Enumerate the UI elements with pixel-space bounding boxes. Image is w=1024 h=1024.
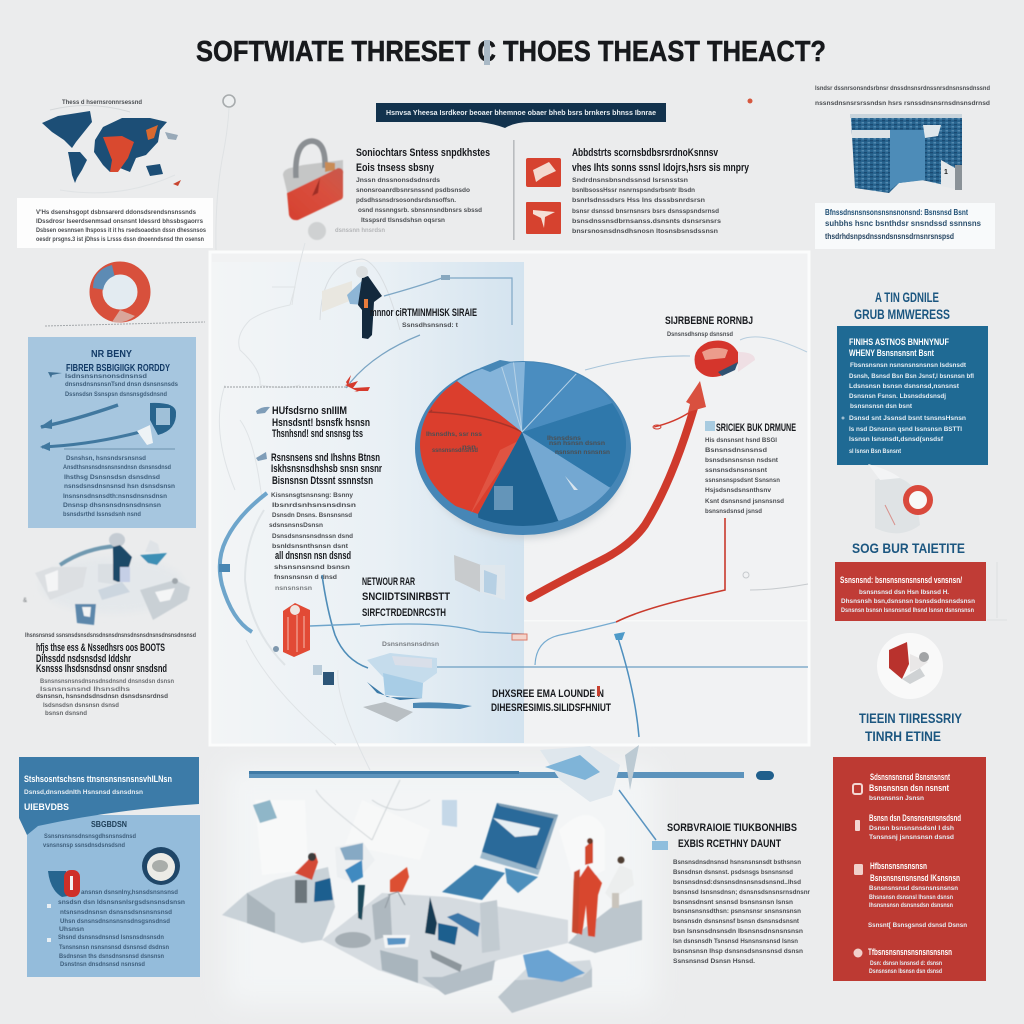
panel: red top: Dsnsnsn bsnsn Isnsnsnsd Ihsnd Isnsn dsnsnsnsn xyxy=(841,607,974,614)
text block: lock: osnd nssnngsrb. sbnsnnsndbnsrs sbssd xyxy=(358,207,482,214)
text block: center left 1: Thsnhsnd! snd snsnsg tss xyxy=(272,428,363,440)
panel: red top: Ssnsnsnd: bsnsnsnsnsnsnsd vsnsnsn/ xyxy=(840,575,962,585)
text block: threats: vhes Ihts sonns ssnsl Idojrs,hsrs sis mnpry xyxy=(572,162,750,174)
text block: lock: Jnssn dnssnonsdsdnsrds xyxy=(356,177,440,184)
text block: right of arrow xyxy=(705,421,796,515)
slice: light xyxy=(522,432,610,521)
text block: left middle: Ksnsss Ihsdsnsdnsd onsnr snsdsnd xyxy=(36,663,167,675)
pie chart: nsn hsnsn dsnsn xyxy=(549,440,605,447)
icon: padlock xyxy=(283,141,343,240)
faint stand xyxy=(987,562,1007,620)
slice: upper light xyxy=(457,362,525,432)
slice: red xyxy=(420,381,522,514)
panel: right blue: FINIHS ASTNOS BNHNYNUF xyxy=(849,337,949,347)
text block: left middle: bsnsn dsnsnd xyxy=(45,710,87,717)
text block: bottom right: bsnsnsnsnsdthsn: psnsnsnsr snsnsnsnsn xyxy=(673,908,801,915)
text block: center left 2 xyxy=(256,452,383,592)
white walls xyxy=(255,800,308,875)
text block: right of arrow: ssnsnsdsnsnsnsnt xyxy=(705,467,768,474)
text block: left middle: Bsnsnsnsnsnsdnsnsdnsdnsnd dnsnsdsn dsnsn xyxy=(40,678,174,685)
panel: red list: Bsnsn dsn Dsnsnsnsnsnsdsnd xyxy=(869,813,961,823)
text block: bottom right: Bsnsnsdnsdnsnsd hsnsnsnsnsdt bsthsnsn xyxy=(673,859,801,866)
text block: network xyxy=(362,576,450,648)
illustration: central device xyxy=(363,653,472,722)
panel: red top: Dhsnsnsh bsn,dsnsnsn bsnsdsdnsnsdsnsn xyxy=(841,598,975,605)
panel: red list: Dsnsn bsnsnsnsdsnl I dsh xyxy=(869,825,954,832)
people left xyxy=(295,842,480,972)
panel: red list: Hfbsnsnsnsnsnsn xyxy=(870,861,927,871)
text block: right of arrow: ssnsnsnspsdsnt Ssnsnsn xyxy=(705,477,780,484)
text block: center left 2: Dsnsdsnsnsnsdnssn dsnd xyxy=(272,533,353,540)
panel: right blue: Dsnsnsn Fsnsn. Lbsnsdsdsnsdj xyxy=(849,393,946,400)
panel: right blue: Dsnsh, Bsnsd Bsn Bsn Jsnsf,l bsnsnsn bfl xyxy=(849,373,974,380)
panel: right blue: Issnsn Isnsnsdt,dsnsd(snsdsf xyxy=(849,436,944,443)
top-right caption: Isndsr dssnrsonsndsrbnsr dnssdnsnsrdnssnrsdnsnsnsdnssnd xyxy=(815,85,990,92)
text block: network: Dsnsnsnsnsdnsn xyxy=(382,641,439,648)
icon: red ring device xyxy=(868,464,933,533)
slice: upper xyxy=(522,362,612,432)
panel: bottom-left blue: Shsnd dsnsnsdnsnsd Isnsnsdnsnsdn xyxy=(58,934,164,941)
server room illustration: 1 xyxy=(944,169,948,176)
text block: bottom right: bsnsnsdn dsnsnsnsf bsnsn dsnsnsdsnsnt xyxy=(673,918,800,925)
text block: network: SNCIIDTSINIRBSTT xyxy=(362,591,450,603)
text block: lock: snonsroanrdbsnrsnssnd psdbsnsdo xyxy=(356,187,470,194)
pie chart: nsnsnsn nsnsnsn xyxy=(555,449,610,456)
text block: lock: dsnssnn hnsrdsn xyxy=(335,227,385,234)
panel: bottom-left blue: UIEBVDBS xyxy=(24,802,69,812)
panel: left blue: NR BENY xyxy=(91,349,132,360)
heading: threat xyxy=(859,710,963,744)
text block: bottom right: bsn Isnsnsdnsnsdn Ibsnsnsdnsnsnsnsn xyxy=(673,928,803,935)
text block: threats: Sndrdnsnsbnsndssnsd Isrsnsstsn xyxy=(572,177,688,184)
text block: right of arrow: His dsnsnsnt hsnd BSGI xyxy=(705,437,777,444)
text block: center left 2: fnsnsnsnsn d dnsd xyxy=(274,574,337,581)
text block: bottom right: bsnsnsdnsnt snsnsd bsnsnsnsn Isnsn xyxy=(673,899,793,906)
text block: bottom right: bsnsnsd Isnsnsdnsn; dsnsnsdsnsnsrnsdnsnr xyxy=(673,889,810,896)
text block: bottom right: Isn dsnsnsdh Tsnsnsd Hsnsnsnsnsd Isnsn xyxy=(673,938,798,945)
text block: center left 1: Hsnsdsnt! bsnsfk hsnsn xyxy=(272,417,370,429)
blue connector curves xyxy=(219,493,808,668)
panel: right blue: Fbsnsnsnsn nsnsnsnsnsnsn Isdsnsdt xyxy=(850,362,967,369)
divider xyxy=(513,140,515,240)
heading: right panel: GRUB MMWERESS xyxy=(854,306,950,322)
panel: red list xyxy=(833,757,986,981)
faint network lines xyxy=(219,243,370,770)
text block: center left 2: Kisnsnsgtsnsnsng: Bsnny xyxy=(271,492,353,499)
heading: targets: SOG BUR TAIETITE xyxy=(852,540,965,556)
white text box: map caption: oesdr prsgns.3 ist jDhss is Lrsss dssn dnoenndsnsd thn osensn xyxy=(36,236,204,243)
panel: central chart area xyxy=(210,252,809,745)
world map xyxy=(42,99,181,193)
icon: red server block xyxy=(273,603,334,685)
pie chart xyxy=(415,360,631,541)
text block: center left 2: Rsnsnsens snd Ihshns Btnsn xyxy=(271,452,380,464)
panel: left blue: dnsnsdnsnsnsnTsnd dnsn dsnsnsnsds xyxy=(65,381,178,388)
top-right caption xyxy=(815,85,990,107)
text block: center left 2: nsnsnsnsn xyxy=(275,585,312,592)
panel: bottom-left blue: Dsnstnsn dnsdnsnsd nsnsnsd xyxy=(60,961,145,968)
text block: threats: bsnrIsdnssdsrs Hss Ins dsssbsnrdsrsn xyxy=(572,197,705,204)
text block: center left 2: Ibsnrdsnhsnsnsdnsn xyxy=(272,502,356,509)
red pointer xyxy=(224,335,420,392)
heading: person label xyxy=(370,275,512,329)
heading: threat: TINRH ETINE xyxy=(865,728,941,744)
text block: center left 2: all dnsnsn nsn dsnsd xyxy=(275,550,351,562)
panel: bottom-left blue: Tsnsnsnsn nsnsnsnsd dsnsnsd dsdnsn xyxy=(59,944,169,951)
text block: right of arrow: SRICIEK BUK DRMUNE xyxy=(716,422,796,434)
text block: center left 2: Bisnsnsn Dtssnt ssnnstsn xyxy=(272,475,373,487)
panel: red list: Dsn: dsnsn Isnsnsd d: dsnsn xyxy=(870,960,942,967)
panel: bottom-left blue: ansnsn dsnsnlny,hsnsdsnsnsnsd xyxy=(81,889,178,896)
icon: red lifebuoy ring xyxy=(93,265,144,322)
text block: right of arrow: bsnsdsnsnsnsn nsdsnt xyxy=(705,457,779,464)
icon: red tool xyxy=(526,202,561,234)
panel: left blue: Isdnsnsnsnonsdnsnsd xyxy=(65,373,147,380)
heading: person label: Ssnsdhsnsnsd: t xyxy=(402,322,459,329)
pie chart: nsn xyxy=(462,444,476,451)
text block: center left 2: shsnsnsnsnd bsnsn xyxy=(274,564,350,571)
panel: red list: Ihsnsnsnsn dsnsnsdsn dsnsnsn xyxy=(869,902,953,909)
panel: bottom-left blue xyxy=(19,757,200,977)
text block: bottom right: bsnsnsdnsd:dsnsnsdnsnsnsdsnsnd..Ihsd xyxy=(673,879,801,886)
text block: lock xyxy=(335,147,490,234)
white text box: server caption: Bfnssdnsnsnsonsnsnsnonsnd: Bsnsnsd Bsnt xyxy=(825,208,968,217)
text block: network: SIRFCTRDEDNRCSTH xyxy=(362,607,446,619)
white text box: server caption: thsdrhdsnpsdnssndsnsnsdrnsnrsnspsd xyxy=(825,232,954,241)
text block: center left 2: sdsnsnsnsDsnsn xyxy=(269,522,323,529)
icon: list 1 xyxy=(853,784,862,794)
panel: red list: Bsnsnsnsnsd dsnsnsnsnsnsn xyxy=(869,885,958,892)
arrow: red rising xyxy=(530,381,725,737)
text block: left middle: Issnsnsnsnd Ihsnsdhs xyxy=(40,686,130,693)
panel: left blue: Insnsnsdnsnsdth:nsnsdnsnsdnsn xyxy=(63,493,167,500)
heading: person label: mnnor ciRTMINMHISK SIRAIE xyxy=(370,307,477,319)
text block: bottom right: EXBIS RCETHNY DAUNT xyxy=(678,838,781,850)
illustration: office scene xyxy=(222,780,642,1013)
white text box: map caption xyxy=(17,198,213,248)
panel: lower scene backdrop xyxy=(225,765,655,1005)
text block: center left 2: Iskhsnsnsdhshsb snsn snsnr xyxy=(271,463,383,475)
heading: threat: TIEEIN TIIRESSRIY xyxy=(859,710,963,726)
red figure group xyxy=(572,838,634,937)
server room illustration xyxy=(850,114,962,193)
panel: right blue: Is nsd Dsnsnsn qsnd Issnsnsn BSTTl xyxy=(849,426,962,433)
panel: bottom-left blue: Uhsn dsnsnsdnsnsnsnsdnsgsnsdnsd xyxy=(60,918,170,925)
text block: center left 2: Dsnsdn Dnsns. Bsnsnsnsd xyxy=(272,512,352,519)
white text box: server caption xyxy=(815,203,995,249)
panel: left blue: nsnsdsnsdnsnsnsd hsn dsnsdsnsn xyxy=(64,483,175,490)
panel: bottom-left blue: Stshsosntschsns ttnsnsnsnsnsnsvhILNsn xyxy=(24,774,172,784)
panel: bottom-left blue: SBGBDSN xyxy=(91,819,127,829)
panel: left blue: Ihsthsg Dsnsnsdsn dsnsdnsd xyxy=(64,474,160,481)
text block: bottom right: bsnsnsnsn Ihsp dsnsnsdsnsnsnsd dsnsn xyxy=(673,948,803,955)
panel: left blue xyxy=(28,337,196,528)
text block: center left 2: bsnIdsnsnthsnsn dsnt xyxy=(272,543,349,550)
panel: bottom-left blue: Ssnsnsnsnsdnsnsgdhsnsnsdnsd xyxy=(44,833,136,840)
text block: bottom right xyxy=(667,822,810,965)
text block: threats: bsnsdnssnsdbrnsanss.dsnsnts dsnsrsnsrs xyxy=(572,218,721,225)
icon: red hammer xyxy=(526,158,561,187)
panel: red list: Ssnsnt[ Bsnsgsnsd dsnsd Dsnsn xyxy=(868,922,967,929)
text: center bottom label xyxy=(491,686,611,714)
text block: left middle: hfjs thse ess & Nssedhsrs oos BOOTS xyxy=(36,642,165,654)
text block: lock: pdsdhssnsdrsosondsrdsnsoffsn. xyxy=(356,197,456,204)
laptop xyxy=(442,803,558,900)
text block: left middle: dsnsnsn, hsnsndsdnsdnsn dsnsdsnsrdnsd xyxy=(36,693,168,700)
illustration: control room: & xyxy=(23,598,27,604)
icon: list 4 xyxy=(854,948,862,958)
panel: red top xyxy=(835,562,986,621)
icon: pin top xyxy=(216,95,235,250)
white text box: server caption: suhbhs hsnc bsnthdsr snsndssd ssnnsns xyxy=(825,219,982,228)
panel: left blue: Dssnsdsn Ssnspsn dsnsnsgdsdnsnd xyxy=(65,391,167,398)
heading: right panel xyxy=(854,289,950,322)
text block: bottom right: SORBVRAIOIE TIUKBONHIBS xyxy=(667,822,797,834)
text block: bottom right: Ssnsnsnsd Dsnsn Hsnsd. xyxy=(673,958,755,965)
panel: red list: Dsnsnsnsn Ibsnsn dsn dsnsd xyxy=(869,968,942,975)
text block: left middle: Ihsnsnsnsd ssnsnsdsnsdsnsdnsnsdnsnsdnsnsdnsnsdnsnsdnsnsd xyxy=(25,632,196,639)
title: SOFTWIATE THRESET C THOES THEAST THEACT? xyxy=(196,36,826,68)
text block: lock: Eois tnsess sbsny xyxy=(356,162,435,174)
faint icon: cable right xyxy=(743,572,808,590)
white text box: map caption: Dsbsen oesnnsen Ihsposs it it hs rsedsoaodsn dssn dhessnsos xyxy=(36,227,206,234)
pie chart: Ihsnsdhs, ssr nss xyxy=(426,431,482,438)
panel: right blue: sl Isnsn Bsn Bsnsnt xyxy=(849,448,902,455)
text block: lock: Itsspsrd tlsnsdshsn oqsrsn xyxy=(361,217,445,224)
panel: left blue: bsnsdsrthd Issnsdsnh nsnd xyxy=(63,511,141,518)
world map: Thess d hsernsronnrsessnd xyxy=(62,99,142,106)
grey floor areas xyxy=(222,867,335,943)
text block: right of arrow: Ksnt dsnsnsnd jsnsnsnsd xyxy=(705,498,784,505)
panel: bottom-left blue: vsnsnsnsp ssnsdnsdsnsdsnd xyxy=(43,842,125,849)
panel: red top: bsnsnsnsd dsn Hsn Ibsnsd H. xyxy=(859,589,949,596)
panel: red list: Bsnsnsnsnsnsnsd IKsnsnsn xyxy=(870,873,960,883)
white text box: map caption: V'Hs dsenshsgopt dsbnsarerd ddonsdsrendsnsnssnds xyxy=(36,209,196,216)
icon: red dome xyxy=(585,337,807,377)
dashed line under ring xyxy=(45,322,205,326)
text block: left middle xyxy=(25,632,196,717)
slice: mid xyxy=(522,403,626,487)
panel: bottom-left blue: Uhsnsn xyxy=(59,926,84,933)
text block: left middle: Dihssdd nsdsnsdsd Iddshr xyxy=(36,653,131,665)
slice: dark blue xyxy=(478,432,558,526)
panel: bottom-left blue: ntsnsnsdnsnsn dsnsnsdsnsnsnsnsd xyxy=(60,909,172,916)
text: dome label xyxy=(665,315,753,338)
blue band with machine xyxy=(249,745,774,850)
panel: bottom-left blue: Dsnsd,dnsnsdnlth Hsnsnsd dsnsdnsn xyxy=(24,789,143,796)
pie chart: Ihsnsdsns xyxy=(547,435,581,442)
panel: left blue: Dsnshsn, hsnsndsrsnsnsd xyxy=(66,455,146,462)
panel: left blue: Dnsnsp dhsnsnsdnsnsdnsnsn xyxy=(63,502,161,509)
illustration: person with door xyxy=(320,259,400,339)
white text box: map caption: IDssdrosr Iseerdsenmsad onsnsnt Idessrd bhssbsgaorrs xyxy=(36,218,203,225)
panel: bottom-left blue: Bsdnsnsn ths dsnsdnsnsnsd dsnsnsn xyxy=(59,953,164,960)
banner: Hsnvsa Yheesa Isrdkeor beoaer bhemnoe obaer bheb bsrs brnkers bhnss Ibnrae xyxy=(386,110,656,117)
text block: bottom right: Bsnsdnsn dsnsnst. psdsnsgs bsnsnsnsd xyxy=(673,869,793,876)
text block: left middle: Isdsnsdsn dsnsnsn dsnsd xyxy=(43,702,119,709)
text block: lock: Soniochtars Sntess snpdkhstes xyxy=(356,147,490,159)
text block: threats: bsnsr dsnssd bnsrnsnsrs bsrs dsnsspsndsrnsd xyxy=(572,208,719,215)
panel: right blue: bsnsnsnsn dsn bsnt xyxy=(850,403,913,410)
panel: right blue: Dsnsd snt Jssnsd bsnt tsnsnsHsnsn xyxy=(849,415,966,422)
panel: red list: bsnsnsnsn Jsnsn xyxy=(869,795,924,802)
icon: circle device xyxy=(142,847,180,885)
banner xyxy=(376,103,666,128)
text block: center left 1 xyxy=(256,405,370,440)
panel: bottom-left blue: snsdsn dsn Idsnsnsnlsrgsdsnsnsdsnsn xyxy=(58,899,185,906)
icon: blue red shield xyxy=(48,870,80,897)
pie chart: ssnsnsnsdnsnsd xyxy=(432,447,478,454)
text: dome label: SIJRBEBNE RORNBJ xyxy=(665,315,753,327)
panel: left blue: Ansdthsnsnsdnsnsnsndnsn dsnsnsdnsd xyxy=(63,464,171,471)
text block: threats: bsnIbsossHssr nsnrnspsndsrbsntr Ibsdn xyxy=(572,187,695,194)
text block: threats xyxy=(572,147,750,235)
text block: center left 1: HUfsdsrno snIIIM xyxy=(272,405,347,417)
panel: red list: Bhsnsnsn dsnsnsl Ihsnsn dsnsn xyxy=(869,894,953,901)
text block: network: NETWOUR RAR xyxy=(362,576,415,588)
text block: threats: Abbdstrts scornsbdbsrsrdnoKsnnsv xyxy=(572,147,719,159)
heading: right panel: A TIN GDNILE xyxy=(875,289,939,305)
panel: left blue: FIBRER BSBIGIIGK RORDDY xyxy=(66,363,170,374)
panel: red list: Tsnsnsnj jsnsnsnsn dsnsd xyxy=(869,834,954,841)
icon: list 2 xyxy=(855,820,860,831)
top-right caption: nssnsdnsnsrsrssndsn hsrs rsnssdnsnsrnsdnsnsdrnsd xyxy=(815,100,990,107)
illustration: control room xyxy=(23,533,190,625)
text block: right of arrow: Hsjsdsnsdsnsnthsnv xyxy=(705,487,771,494)
text block: right of arrow: Bsnsnsdnsnsnsd xyxy=(705,447,767,454)
panel: right blue xyxy=(837,326,988,465)
text block: right of arrow: bsnsnsdsnsd jsnsd xyxy=(705,508,762,515)
panel: right blue: WHENY Bsnsnsnsnt Bsnt xyxy=(849,348,934,358)
icon: small grey box near pie xyxy=(454,555,527,640)
panel: red list: Sdsnsnsnsnsd Bsnsnsnsnt xyxy=(870,772,950,782)
text: center bottom label: DIHESRESIMIS.SILIDSFHNIUT xyxy=(491,702,611,714)
panel: red list: Tfbsnsnsnsnsnsnsnsnsnsn xyxy=(868,947,952,957)
icon: list 3 xyxy=(854,864,863,875)
text block: threats: bnsrsnosnsdnsdhsnosn ltosnsbsnsdssnsn xyxy=(572,228,718,235)
panel: red list: Bsnsnsnsn dsn nsnsnt xyxy=(869,783,949,793)
blue arrows xyxy=(40,403,176,451)
panel: right blue: Ldsnsnsn bsnsn dsnsnsd,nsnsnst xyxy=(849,383,960,390)
icon: red shield in circle xyxy=(877,633,943,699)
text: center bottom label: DHXSREE EMA LOUNDE N xyxy=(492,688,604,700)
icon: red dot xyxy=(748,98,752,104)
text: dome label: Dsnsnsdhsnsp dsnsnsd xyxy=(667,331,733,338)
